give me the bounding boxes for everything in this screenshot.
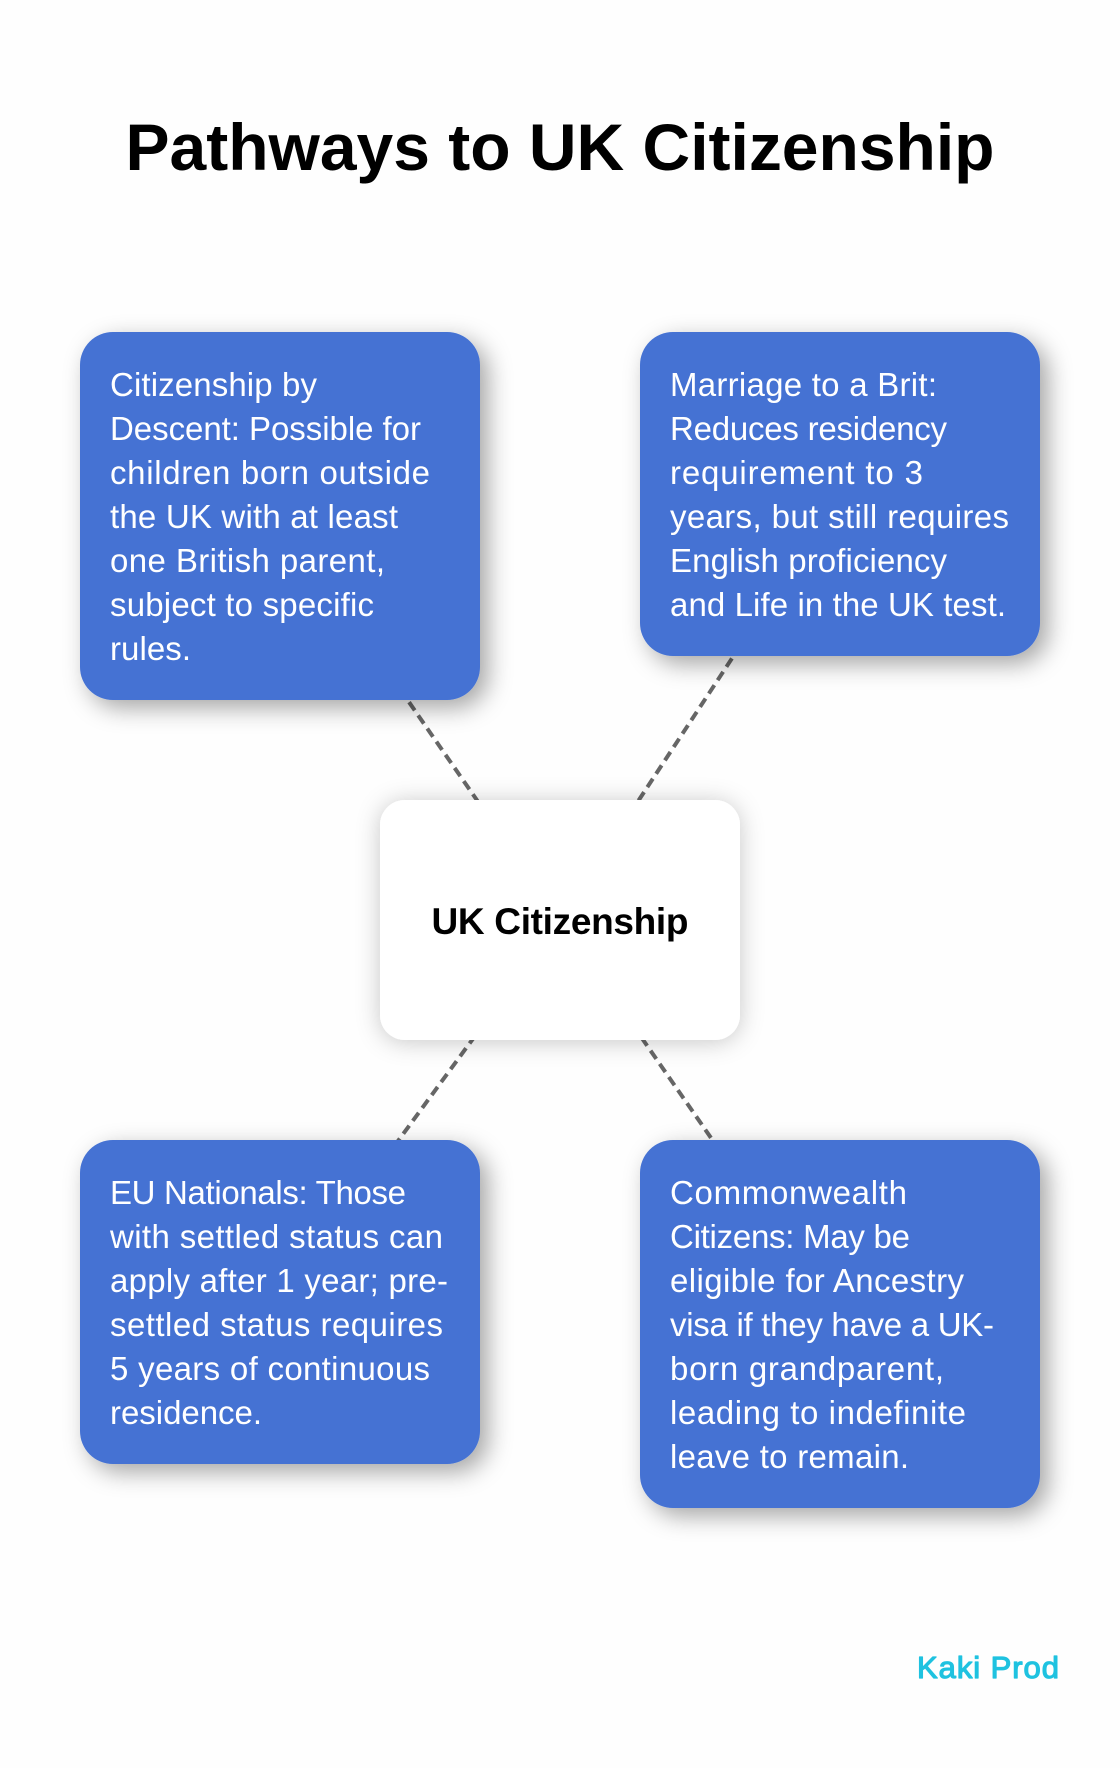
panel: EU nationals: apply after 1 year; pre- bbox=[110, 1262, 448, 1299]
panel: marriage to a Brit: Marriage to a Brit: bbox=[670, 366, 937, 403]
panel: UK citizenship centre bbox=[380, 800, 740, 1040]
panel: marriage to a Brit: and Life in the UK test. bbox=[670, 586, 1006, 623]
panel: EU nationals: EU Nationals: Those bbox=[110, 1174, 406, 1211]
panel: EU nationals: with settled status can bbox=[109, 1218, 443, 1255]
panel: citizenship by descent: one British parent, bbox=[110, 542, 385, 579]
panel: citizenship by descent: Descent: Possible for bbox=[110, 410, 421, 447]
panel: Commonwealth citizens: eligible for Ancestry bbox=[670, 1262, 964, 1299]
title: Pathways to UK Citizenship bbox=[126, 110, 994, 184]
connector: EU nationals to centre bbox=[280, 920, 560, 1302]
panel: UK citizenship centre: UK Citizenship bbox=[432, 901, 688, 942]
panel: marriage to a Brit: requirement to 3 bbox=[670, 454, 923, 491]
panel: Commonwealth citizens: leave to remain. bbox=[670, 1438, 909, 1475]
panel: Commonwealth citizens: visa if they have a UK- bbox=[670, 1306, 994, 1343]
panel: citizenship by descent bbox=[80, 332, 480, 700]
panel: citizenship by descent: rules. bbox=[110, 630, 191, 667]
connector: citizenship by descent to centre bbox=[280, 516, 560, 920]
connector: Commonwealth citizens to centre bbox=[560, 920, 840, 1324]
panel: citizenship by descent: the UK with at least bbox=[110, 498, 398, 535]
panel: marriage to a Brit: years, but still requires bbox=[670, 498, 1009, 535]
panel: marriage to a Brit: Reduces residency bbox=[670, 410, 948, 447]
logo: Kaki Prod: Kaki Prod bbox=[917, 1650, 1059, 1685]
panel: marriage to a Brit: English proficiency bbox=[670, 542, 948, 579]
panel: marriage to a Brit bbox=[640, 332, 1040, 656]
panel: Commonwealth citizens: Citizens: May be bbox=[670, 1218, 910, 1255]
panel: Commonwealth citizens bbox=[640, 1140, 1040, 1508]
panel: citizenship by descent: subject to specific bbox=[110, 586, 374, 623]
panel: EU nationals: residence. bbox=[110, 1394, 262, 1431]
panel: citizenship by descent: children born outside bbox=[110, 454, 430, 491]
panel: Commonwealth citizens: Commonwealth bbox=[670, 1174, 907, 1211]
panel: EU nationals bbox=[80, 1140, 480, 1464]
panel: citizenship by descent: Citizenship by bbox=[110, 366, 318, 403]
panel: EU nationals: 5 years of continuous bbox=[110, 1350, 430, 1387]
panel: Commonwealth citizens: born grandparent, bbox=[670, 1350, 944, 1387]
panel: Commonwealth citizens: leading to indefinite bbox=[670, 1394, 966, 1431]
panel: EU nationals: settled status requires bbox=[110, 1306, 443, 1343]
connector: marriage to a Brit to centre bbox=[560, 494, 840, 920]
